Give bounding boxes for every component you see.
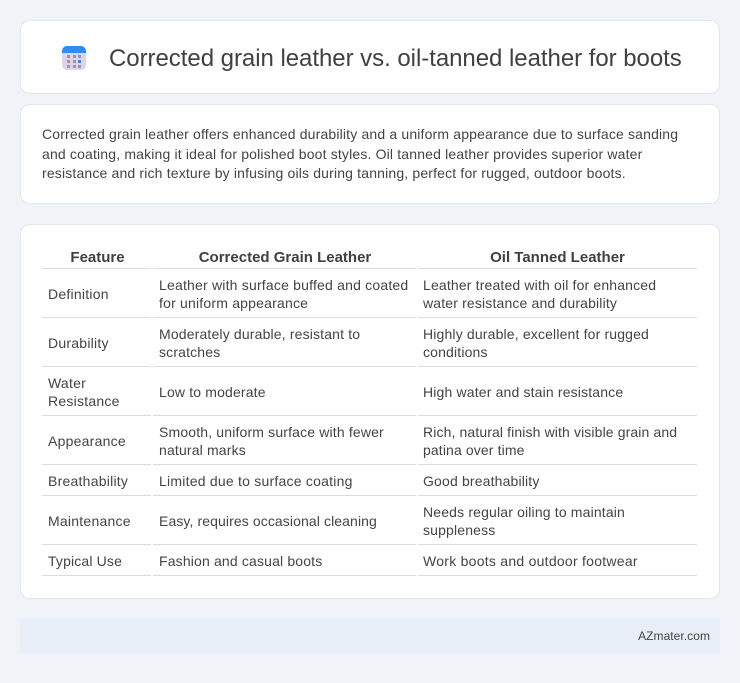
row: maintenance: suppleness — [423, 522, 495, 538]
row: water resistance — [48, 375, 623, 409]
table header: Feature — [70, 249, 125, 266]
row: typical use — [48, 553, 638, 569]
row: appearance: Appearance — [48, 433, 126, 449]
row: durability: Highly durable, excellent for rugged — [423, 326, 649, 342]
row: appearance — [48, 424, 677, 458]
comparison table panel — [20, 224, 720, 599]
intro text: Corrected grain leather offers enhanced durability and a uniform appearance due to surface sanding — [42, 126, 678, 142]
title panel — [20, 20, 720, 94]
row: water resistance: Low to moderate — [159, 384, 266, 400]
row: appearance: Smooth, uniform surface with fewer — [159, 424, 384, 440]
row: appearance: natural marks — [159, 442, 246, 458]
footer credit: AZmater.com — [638, 629, 710, 643]
row: durability: scratches — [159, 344, 220, 360]
row: water resistance: High water and stain resistance — [423, 384, 623, 400]
table header: Corrected Grain Leather — [199, 249, 371, 266]
row: maintenance: Needs regular oiling to maintain — [423, 504, 625, 520]
row: definition: Leather treated with oil for enhanced — [423, 277, 656, 293]
row: breathability: Breathability — [48, 473, 128, 489]
row: durability — [48, 326, 649, 360]
row: definition — [48, 277, 656, 311]
row: maintenance: Maintenance — [48, 513, 131, 529]
row: definition: Leather with surface buffed and coated — [159, 277, 408, 293]
footer bar — [20, 619, 720, 653]
row: maintenance — [48, 504, 625, 538]
row: breathability: Limited due to surface coating — [159, 473, 353, 489]
intro text: and coating, making it ideal for polished boot styles. Oil tanned leather provides superior water — [42, 146, 642, 162]
icon: calendar — [62, 46, 86, 70]
table header — [70, 249, 625, 266]
intro text — [42, 126, 678, 181]
row: definition: Definition — [48, 286, 109, 302]
row: water resistance: Water — [48, 375, 86, 391]
row: typical use: Work boots and outdoor footwear — [423, 553, 638, 569]
row: durability: conditions — [423, 344, 488, 360]
row: appearance: Rich, natural finish with visible grain and — [423, 424, 677, 440]
row: typical use: Typical Use — [48, 553, 122, 569]
intro panel — [20, 104, 720, 204]
row: definition: water resistance and durability — [423, 295, 617, 311]
row: durability: Durability — [48, 335, 109, 351]
row: appearance: patina over time — [423, 442, 525, 458]
table header: Oil Tanned Leather — [490, 249, 625, 266]
row: breathability — [48, 473, 540, 489]
intro text: resistance and rich texture by infusing oils during tanning, perfect for rugged, outdoor boots. — [42, 165, 626, 181]
row: maintenance: Easy, requires occasional cleaning — [159, 513, 377, 529]
row: water resistance: Resistance — [48, 393, 120, 409]
row: definition: for uniform appearance — [159, 295, 308, 311]
title: Corrected grain leather vs. oil-tanned leather for boots — [109, 45, 682, 72]
row: typical use: Fashion and casual boots — [159, 553, 322, 569]
row: durability: Moderately durable, resistant to — [159, 326, 360, 342]
row: breathability: Good breathability — [423, 473, 540, 489]
